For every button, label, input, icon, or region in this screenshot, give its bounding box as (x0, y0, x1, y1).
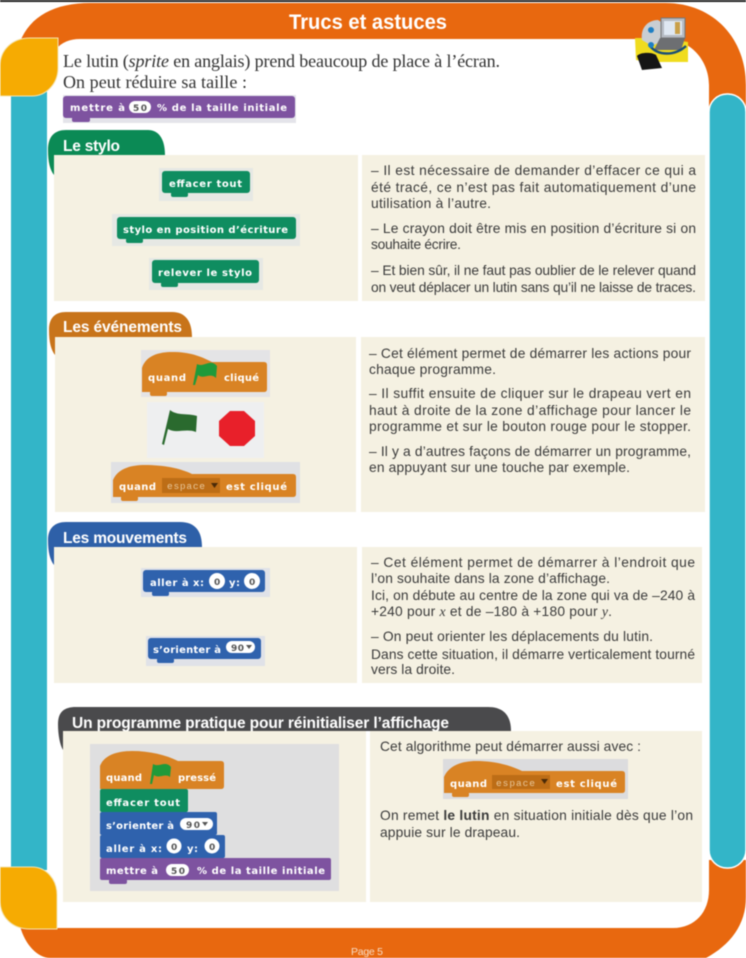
block: quand drapeau cliqué: cliqué (224, 372, 259, 384)
right panel: motion explanations: +240 pour x et de –180 à +180 pour y. (371, 604, 612, 619)
heading tab: les mouvements (48, 522, 202, 565)
intro text (63, 51, 500, 92)
right panel: event explanations: programme et sur le bouton rouge pour le stopper. (369, 419, 691, 434)
right panel: stylo explanations: utilisation à l’autre. (371, 196, 491, 211)
stacked scratch program: quand (106, 773, 142, 784)
right panel: motion explanations: – On peut orienter les déplacements du lutin. (371, 629, 653, 644)
orange header band (20, 3, 746, 110)
right panel: motion explanations (362, 547, 702, 683)
title: Trucs et astuces (289, 11, 447, 34)
block: s'orienter à 90 (146, 636, 265, 666)
icons: green flag and red stop (147, 402, 264, 458)
stacked scratch program: s’orienter à (106, 820, 174, 832)
right panel: stylo explanations: – Il est nécessaire de demander d’effacer ce qui a (371, 163, 696, 178)
block: stylo en position d'écriture: stylo en position d’écriture (123, 224, 288, 236)
heading tab: programme: Un programme pratique pour réinitialiser l’affichage (72, 715, 449, 732)
block: quand espace est cliqué: espace (167, 481, 205, 492)
panel: les mouvements (48, 522, 702, 683)
stacked scratch program: aller à x: (106, 843, 162, 855)
block: s'orienter à 90: 90 (231, 644, 244, 654)
bottom yellow corner (0, 867, 57, 929)
right panel: stylo explanations: souhaite écrire. (371, 237, 461, 252)
right panel: event explanations: en appuyant sur une touche par exemple. (369, 460, 630, 475)
intro text: Le lutin (sprite en anglais) prend beaucoup de place à l’écran. (63, 51, 500, 72)
left panel: event blocks (55, 337, 356, 512)
right panel: event explanations: haut à droite de la zone d’affichage pour lancer le (369, 403, 691, 418)
block: s'orienter à 90: s’orienter à (153, 644, 221, 656)
intro text: On peut réduire sa taille : (63, 72, 247, 92)
right panel: motion explanations: – Cet élément permet de démarrer à l’endroit que (371, 555, 695, 570)
right panel: motion explanations: vers la droite. (371, 662, 455, 677)
right panel: event explanations: – Cet élément permet de démarrer les actions pour (369, 346, 691, 361)
stacked scratch program: pressé (178, 772, 216, 784)
block: quand drapeau cliqué (141, 350, 270, 397)
right panel: program explanation: appuie sur le drapeau. (380, 825, 520, 840)
right panel: program explanation (370, 731, 702, 902)
panel: les événements (49, 312, 705, 512)
left teal bar (11, 90, 47, 870)
block: quand espace est cliqué (variant): quand (450, 779, 487, 790)
stacked scratch program: 0 (209, 843, 215, 853)
block: effacer tout (159, 168, 253, 201)
left panel: stylo blocks (54, 155, 358, 301)
block: aller à x y: y: (229, 578, 240, 589)
block: aller à x y: 0 (214, 578, 220, 588)
block: relever le stylo: relever le stylo (158, 268, 252, 279)
heading tab: les événements (49, 312, 192, 355)
right panel: event explanations: chaque programme. (369, 362, 496, 377)
heading tab: le stylo: Le stylo (63, 138, 120, 155)
right panel: stylo explanations: on veut déplacer un lutin sans qu’il ne laisse de traces. (371, 280, 696, 295)
block: quand espace est cliqué (111, 462, 300, 503)
stacked scratch program: y: (187, 844, 198, 855)
block: quand espace est cliqué: quand (119, 482, 156, 493)
page number: Page 5 (351, 946, 383, 958)
stacked scratch program: mettre à (106, 865, 158, 877)
icon: computer and robot (635, 18, 688, 70)
block: aller à x y (141, 568, 270, 597)
right panel: stylo explanations (362, 155, 705, 301)
heading tab: les événements: Les événements (63, 319, 182, 336)
right panel: program explanation: Cet algorithme peut démarrer aussi avec : (380, 739, 641, 754)
block: quand espace est cliqué (variant) (443, 759, 628, 799)
stacked scratch program: effacer tout (106, 798, 180, 809)
stacked scratch program: % de la taille initiale (197, 866, 325, 877)
right panel: motion explanations: Ici, on débute au centre de la zone qui va de –240 à (371, 588, 695, 603)
right panel: stylo explanations: été tracé, ce n’est pas fait automatiquement d’une (371, 180, 696, 195)
block: mettre à 50 %: mettre à (70, 102, 125, 114)
right panel: event explanations (361, 337, 705, 512)
right panel: event explanations: – Il y a d’autres façons de démarrer un programme, (369, 444, 691, 459)
block: effacer tout: effacer tout (169, 179, 242, 190)
orange footer band (20, 860, 746, 958)
block: mettre à 50 %: 50 (133, 104, 147, 114)
heading tab: programme (58, 707, 511, 750)
block: quand drapeau cliqué: quand (148, 373, 186, 384)
block: stylo en position d'écriture (112, 214, 300, 246)
block: aller à x y: 0 (249, 578, 255, 588)
panel: le stylo (48, 130, 705, 301)
stacked scratch program: 50 (171, 867, 185, 877)
left panel: motion blocks (54, 547, 357, 683)
block: aller à x y: aller à x: (150, 577, 204, 589)
stacked scratch program (100, 751, 331, 884)
right panel: stylo explanations: – Et bien sûr, il ne faut pas oublier de le relever quand (371, 263, 696, 278)
stacked scratch program: 0 (171, 843, 177, 853)
block: mettre à 50 % (63, 95, 296, 123)
right panel: program explanation: On remet le lutin en situation initiale dès que l’on (380, 808, 693, 823)
block: quand espace est cliqué (variant): espace (496, 778, 535, 789)
heading tab: le stylo (48, 130, 165, 175)
block: quand espace est cliqué: est cliqué (226, 481, 287, 493)
right panel: motion explanations: l’on souhaite dans la zone d’affichage. (371, 571, 610, 586)
panel: un programme pratique (58, 707, 702, 902)
block: quand espace est cliqué (variant): est cliqué (556, 778, 617, 790)
right panel: event explanations: – Il suffit ensuite de cliquer sur le drapeau vert en (369, 386, 691, 401)
heading tab: les mouvements: Les mouvements (63, 530, 187, 547)
stacked scratch program: 90 (186, 821, 200, 831)
right panel: stylo explanations: – Le crayon doit être mis en position d’écriture si on (371, 221, 696, 236)
left panel: full program (63, 731, 366, 902)
right panel: motion explanations: Dans cette situation, il démarre verticalement tourné (371, 647, 695, 662)
block: relever le stylo (149, 258, 263, 290)
block: mettre à 50 %: % de la taille initiale (157, 103, 287, 114)
top yellow corner (0, 38, 58, 96)
right teal bar (709, 94, 746, 868)
